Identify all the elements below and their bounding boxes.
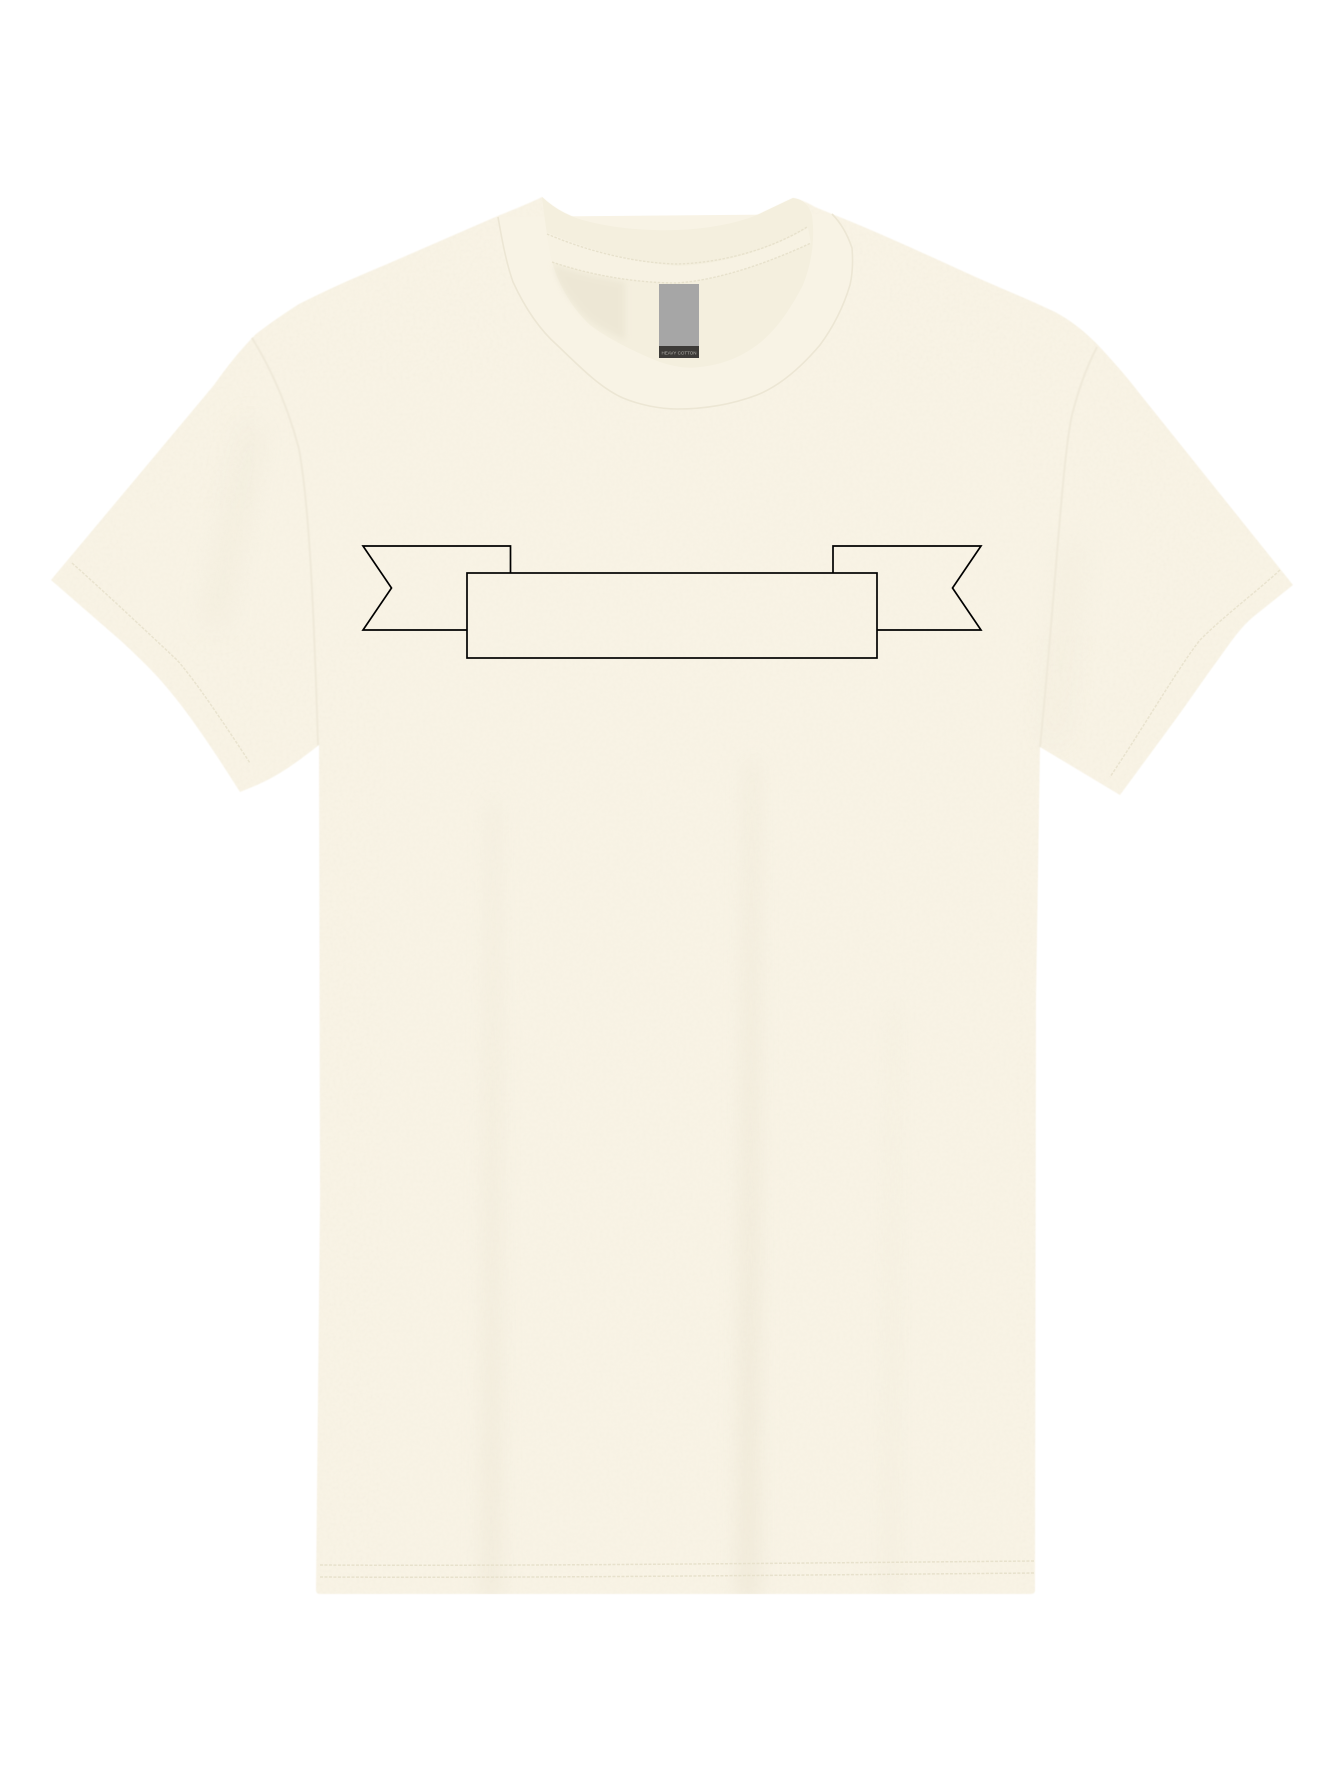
garment neck label: HEAVY COTTON xyxy=(661,350,697,356)
shadow inside neck xyxy=(553,265,625,340)
left ribbon tail xyxy=(363,546,510,630)
t-shirt xyxy=(51,197,1293,1594)
inside of neck opening xyxy=(542,197,813,368)
fabric shading and folds xyxy=(372,575,972,1594)
main ribbon panel xyxy=(467,573,877,658)
bottom hem stitching xyxy=(320,1561,1034,1577)
neck collar xyxy=(498,197,853,409)
armhole seams xyxy=(252,338,1097,747)
garment neck label xyxy=(659,284,699,358)
ribbon banner outline xyxy=(363,546,981,658)
right ribbon tail xyxy=(833,546,981,630)
illustration: t-shirt with ribbon banner xyxy=(51,197,1293,1594)
back collar ribbing xyxy=(546,228,811,283)
collar rib band xyxy=(498,214,853,409)
sleeve hem stitching xyxy=(72,563,1280,777)
back collar stitching xyxy=(547,227,811,283)
shirt silhouette xyxy=(51,197,1293,1594)
